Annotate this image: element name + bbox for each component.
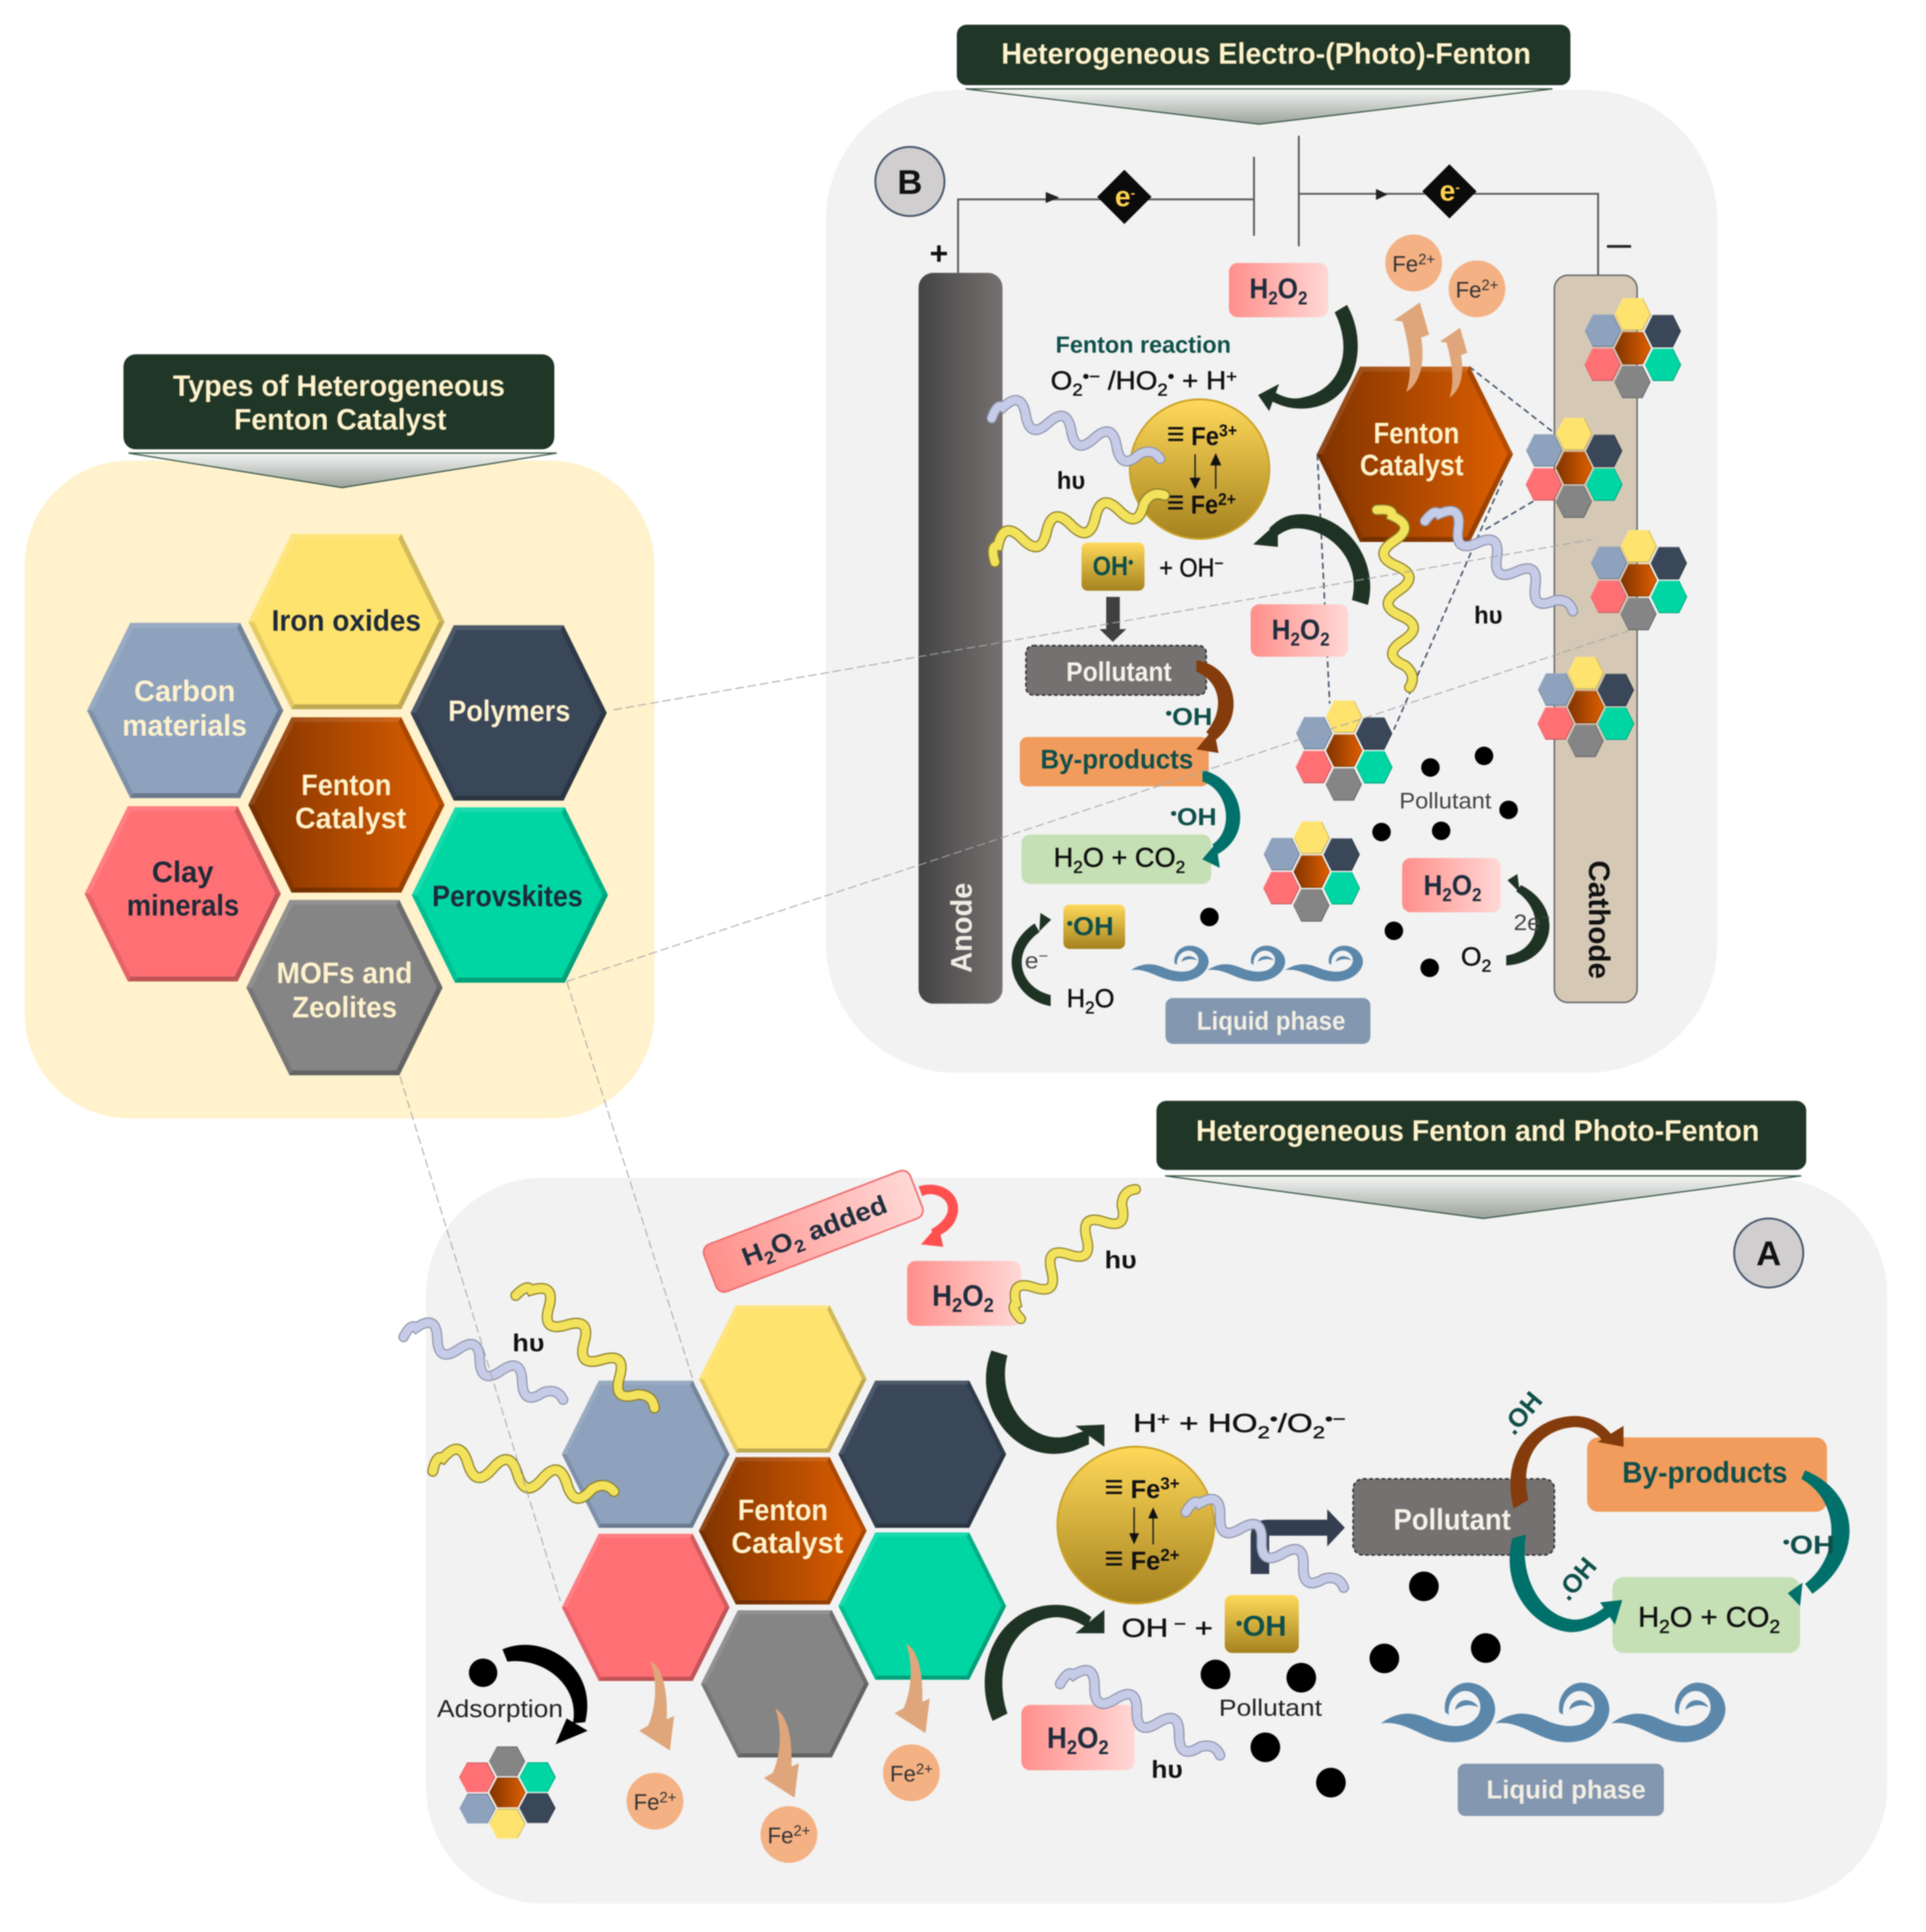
arrow: H2O2 to radicals: [1258, 305, 1358, 411]
hexagon: fenton catalyst: Catalyst: [295, 802, 406, 835]
label: hydroxyl right: OH: [1790, 1530, 1835, 1559]
hydroxyl radical box A: OH: [1242, 1610, 1286, 1642]
hexagon: mofs and zeolites: [246, 900, 443, 1075]
hexagon: iron oxides: [248, 534, 444, 709]
hexagon: clay minerals: [85, 806, 281, 981]
iron redox sphere A: 3+: [1161, 1474, 1180, 1493]
pollutant box B: Pollutant: [1066, 657, 1172, 687]
Fe2+ bubble 1: Fe: [1392, 252, 1418, 277]
label: hydroxyl right: •: [1783, 1532, 1790, 1552]
H2O2 box middle: H: [1272, 614, 1292, 646]
hexagon: polymers: Polymers: [448, 695, 570, 728]
arrow: adsorption: [502, 1645, 588, 1745]
H2O2 box A top: H: [932, 1279, 953, 1313]
light wave: lavender on sphere A: [1186, 1490, 1349, 1602]
arrow: pollutant to by-products: [1196, 660, 1233, 753]
water and CO2 box B: 2: [1176, 857, 1185, 876]
Fe2+ bubble 2: [1448, 260, 1505, 317]
equation: radicals A: •−: [1325, 1409, 1346, 1429]
Fe2+ bubble A2: 2+: [794, 1822, 810, 1839]
light wave: lavender to sphere: [992, 394, 1163, 474]
light wave: yellow on H2O2: [1003, 1183, 1147, 1319]
arrow: H2O2 added: [919, 1185, 958, 1247]
pollutant box A: [1353, 1479, 1554, 1555]
icon: electron diamond right: e: [1439, 175, 1455, 206]
label: two electrons: −: [1540, 909, 1550, 926]
adsorbed pollutant dot: [469, 1659, 497, 1687]
Fe2+ bubble 2: Fe: [1456, 278, 1482, 302]
pollutant dots B: [1200, 747, 1518, 977]
H2O2 box A lower: 2: [1067, 1737, 1077, 1759]
hydroxyl radical box lower: [1063, 905, 1125, 949]
hexagon: mofs and zeolites: MOFs and: [277, 957, 412, 990]
plus sign: +: [929, 236, 948, 272]
equation: superoxide and hydroperoxyl radicals: +: [1226, 366, 1237, 386]
water and CO2 box B: [1021, 834, 1211, 884]
equation: radicals A: •: [1270, 1409, 1278, 1429]
water and CO2 box B: H: [1053, 842, 1073, 873]
iron redox sphere A: ≡ Fe: [1104, 1467, 1161, 1505]
water and CO2 box A: O + CO: [1670, 1601, 1769, 1633]
icon: electron diamond right: [1422, 164, 1476, 218]
equation: radicals A: +: [1157, 1409, 1170, 1429]
arrow: pollutant to by-products A: [1510, 1416, 1624, 1508]
H2O2 added tag: 2: [791, 1235, 808, 1257]
light wave: yellow top on catalyst A: [516, 1277, 661, 1420]
H2O2 box lower: 2: [1472, 884, 1482, 905]
heading: heterogeneous fenton and photo-fenton: Heterogeneous Fenton and Photo-Fenton: [1196, 1114, 1759, 1148]
hydroxyl radical box A: •: [1236, 1613, 1242, 1633]
equation: plus hydroxide: −: [1214, 553, 1223, 573]
hexagon: clay minerals: Clay: [152, 856, 214, 889]
liquid phase label A: [1458, 1764, 1664, 1816]
H2O2 added tag: O: [766, 1226, 797, 1261]
light wave: yellow lower on catalyst A: [433, 1445, 616, 1508]
label: pollutant A: Pollutant: [1219, 1694, 1322, 1720]
icon: electron diamond left: -: [1131, 186, 1135, 201]
hexagon: carbon materials: materials: [122, 709, 247, 742]
hexagon: fenton catalyst: [248, 717, 444, 893]
zoom lines linking catalyst types to panels: [400, 539, 1629, 1601]
Fe2+ bubble A3: 2+: [916, 1760, 933, 1777]
catalyst cluster on cathode 4: [1538, 657, 1634, 757]
label: electron: e: [1025, 949, 1037, 974]
hexagon: carbon materials: [87, 623, 283, 798]
H2O2 box lower: 2: [1442, 884, 1452, 905]
H2O2 box A lower: O: [1077, 1722, 1098, 1755]
equation: superoxide and hydroperoxyl radicals: 2: [1072, 380, 1083, 400]
anode: Anode: [945, 883, 978, 973]
heading: heterogeneous electro-(photo)-fenton: [957, 25, 1570, 124]
icon: electron diamond right: -: [1455, 180, 1460, 195]
label: adsorption: Adsorption: [437, 1695, 563, 1723]
light wave: lavender on catalyst: [1425, 501, 1578, 625]
liquid phase label B: [1166, 998, 1370, 1044]
heading: types of heterogeneous fenton catalyst: Types of Heterogeneous: [173, 369, 505, 402]
equation: radicals A: H: [1133, 1408, 1152, 1438]
equation: hydroxide plus: −: [1168, 1614, 1186, 1633]
light wave: lavender on H2O2: [1060, 1662, 1225, 1770]
H2O2 added tag: [701, 1168, 925, 1295]
pollutant dots A: [1201, 1572, 1501, 1797]
hexagon: iron oxides: Iron oxides: [272, 604, 421, 637]
Fe2+ bubble A2: [760, 1806, 817, 1863]
H2O2 box top: O: [1278, 273, 1298, 305]
H2O2 box A lower: H: [1047, 1722, 1069, 1755]
water and CO2 box A: 2: [1659, 1616, 1670, 1637]
label: photon energy right: hυ: [1474, 602, 1502, 629]
water and CO2 box B: O + CO: [1083, 842, 1176, 873]
H2O2 box middle: [1251, 604, 1348, 657]
by-products box B: [1020, 737, 1209, 786]
label: photon energy left: hυ: [1057, 467, 1085, 494]
catalyst cluster on cathode 1: [1584, 298, 1681, 398]
Fe2+ bubble A1: 2+: [659, 1789, 676, 1806]
Fe2+ bubble 2: 2+: [1482, 277, 1498, 293]
circuit wires: [958, 136, 1598, 276]
anode: [919, 273, 1002, 1004]
label: hydroxyl lower: •: [1171, 804, 1177, 823]
liquid swirls B: [1131, 946, 1363, 981]
equation: superoxide and hydroperoxyl radicals: •: [1168, 366, 1175, 386]
water and CO2 box A: 2: [1769, 1616, 1780, 1637]
equation: superoxide and hydroperoxyl radicals: + H: [1175, 366, 1226, 395]
liquid swirls A: [1381, 1683, 1726, 1742]
label: oxygen: O: [1461, 942, 1481, 971]
icon: electron diamond left: e: [1115, 180, 1131, 212]
label: hydroxyl upper: OH: [1172, 703, 1212, 731]
by-products box B: By-products: [1040, 744, 1193, 774]
H2O2 box lower: [1402, 858, 1501, 912]
badge: B: B: [897, 163, 923, 201]
big catalyst cluster A: [562, 1305, 1006, 1757]
hydroxyl radical box lower: •: [1067, 913, 1073, 933]
H2O2 box A top: 2: [952, 1295, 962, 1316]
hexagon: perovskites: [412, 807, 608, 983]
H2O2 box A top: 2: [984, 1295, 994, 1316]
panel: types of catalyst: [25, 354, 654, 1118]
equation: superoxide and hydroperoxyl radicals: /HO: [1100, 366, 1157, 395]
H2O2 added tag: 2: [762, 1246, 778, 1269]
arrow: Fe2+ release A1: [639, 1662, 674, 1751]
H2O2 box top: [1229, 263, 1328, 317]
H2O2 box middle: 2: [1291, 629, 1300, 650]
water and CO2 box B: 2: [1073, 857, 1083, 876]
water and CO2 box A: H: [1638, 1601, 1659, 1633]
arrow: Fe2+ release 2: [1440, 328, 1468, 397]
iron redox sphere B: ≡ Fe: [1167, 415, 1222, 452]
catalyst cluster on cathode 2: [1526, 417, 1622, 518]
heading: heterogeneous electro-(photo)-fenton: Heterogeneous Electro-(Photo)-Fenton: [1001, 38, 1531, 71]
arrow: Fe2+ release A3: [895, 1644, 930, 1733]
badge: B: [875, 147, 944, 216]
badge: A: A: [1756, 1235, 1781, 1273]
equation: plus hydroxide: + OH: [1159, 553, 1221, 582]
arrow: oxygen reduction: [1506, 874, 1549, 965]
badge: A: [1734, 1218, 1803, 1288]
label: photon energy A bottom: hυ: [1151, 1756, 1183, 1783]
equation: radicals A: + HO: [1170, 1408, 1258, 1438]
label: oxygen: 2: [1482, 956, 1492, 975]
liquid phase label A: Liquid phase: [1487, 1775, 1646, 1804]
Fe2+ bubble A3: [883, 1745, 940, 1801]
Fe2+ bubble 1: 2+: [1418, 251, 1435, 268]
panel A: heterogeneous fenton and photo-fenton: [403, 1101, 1887, 1903]
label: photon energy A left: hυ: [512, 1329, 544, 1357]
hexagon: carbon materials: Carbon: [134, 675, 235, 708]
light wave: yellow on catalyst: [1377, 508, 1419, 689]
hydroxyl radical box lower: OH: [1073, 911, 1113, 940]
arrow: Fe2+ release 1: [1394, 302, 1429, 392]
H2O2 box A lower: [1021, 1705, 1135, 1770]
hydroxyl radical box A: [1225, 1595, 1299, 1653]
H2O2 box lower: O: [1452, 869, 1472, 901]
H2O2 box A top: O: [962, 1279, 984, 1313]
arrow: hydroxyl to pollutant: [1099, 597, 1126, 642]
zoom lines from catalyst hexagon: [1317, 366, 1553, 729]
Fe2+ bubble 1: [1385, 235, 1442, 291]
hexagon: fenton catalyst B: Catalyst: [1360, 449, 1464, 482]
H2O2 box middle: O: [1300, 614, 1320, 646]
catalyst cluster in liquid 1: [1296, 700, 1392, 801]
arrow: H2O2 to hydroxyl: [1253, 514, 1370, 605]
light wave: yellow to sphere: [988, 487, 1170, 562]
equation: superoxide and hydroperoxyl radicals: •−: [1083, 366, 1100, 386]
arrow: H2O2 to radicals A: [986, 1351, 1104, 1454]
H2O2 box top: 2: [1268, 288, 1278, 309]
hexagon: perovskites: Perovskites: [432, 880, 583, 913]
arrow: by-products to water and CO2: [1202, 770, 1240, 868]
heading: types of heterogeneous fenton catalyst: Fenton Catalyst: [234, 403, 447, 437]
arrow: pollutant to water and CO2 A: [1510, 1535, 1622, 1632]
label: hydroxyl rotated top: .OH: [1496, 1386, 1548, 1440]
minus sign: [1607, 245, 1631, 248]
arrow: H2O2 to hydroxyl A: [985, 1605, 1104, 1721]
big catalyst cluster A: Catalyst: [731, 1527, 843, 1560]
iron redox sphere B: ≡ Fe: [1167, 483, 1222, 521]
cathode: Cathode: [1582, 860, 1615, 979]
hydroxyl radical box: •: [1128, 552, 1134, 572]
H2O2 box top: H: [1249, 273, 1270, 305]
H2O2 box middle: 2: [1320, 629, 1329, 650]
hexagon: fenton catalyst: Fenton: [301, 769, 391, 802]
light wave: lavender on catalyst A: [403, 1315, 567, 1414]
iron redox sphere A: [1057, 1447, 1214, 1604]
pollutant box A: Pollutant: [1393, 1503, 1511, 1536]
Fe2+ bubble A2: Fe: [768, 1824, 794, 1848]
H2O2 box A lower: 2: [1098, 1737, 1109, 1759]
label: pollutant B: Pollutant: [1399, 788, 1492, 813]
hexagon: mofs and zeolites: Zeolites: [292, 991, 397, 1024]
iron redox sphere A: 2+: [1161, 1545, 1180, 1565]
label: photon energy A top: hυ: [1104, 1246, 1137, 1274]
hydroxyl radical box: OH: [1093, 551, 1134, 581]
Fe2+ bubble A3: Fe: [890, 1762, 916, 1787]
equation: hydroxide plus: OH: [1121, 1613, 1161, 1642]
big catalyst cluster A: Fenton: [738, 1494, 828, 1527]
equation: radicals A: 2: [1258, 1422, 1270, 1442]
cathode: [1554, 276, 1637, 1002]
liquid phase label B: Liquid phase: [1197, 1006, 1346, 1035]
small inverted catalyst cluster: [459, 1746, 556, 1839]
label: two electrons: 2e: [1514, 910, 1538, 935]
Fe2+ bubble A1: Fe: [634, 1790, 659, 1815]
equation: radicals A: /O: [1278, 1408, 1313, 1438]
hydroxyl radical box: [1081, 543, 1144, 591]
label: water: H: [1067, 984, 1085, 1013]
hexagon: fenton catalyst B: [1317, 366, 1513, 542]
equation: superoxide and hydroperoxyl radicals: O: [1051, 366, 1071, 395]
label: fenton reaction: Fenton reaction: [1056, 331, 1231, 357]
by-products box A: [1587, 1438, 1827, 1512]
iron redox sphere B: 3+: [1219, 421, 1237, 440]
H2O2 box A top: [907, 1261, 1021, 1326]
iron redox sphere A: ≡ Fe: [1104, 1539, 1161, 1577]
arrow: Fe2+ release A2: [764, 1709, 799, 1798]
label: electron: −: [1039, 947, 1048, 964]
arrow: block arrow to pollutant: [1251, 1509, 1345, 1574]
hexagon: polymers: [411, 625, 607, 801]
panel B: heterogeneous electro-(photo)-fenton: [826, 25, 1717, 1073]
hexagon: fenton catalyst B: Fenton: [1374, 417, 1459, 450]
label: water: O: [1095, 984, 1115, 1013]
catalyst cluster in liquid 2: [1263, 822, 1360, 921]
heading: heterogeneous fenton and photo-fenton: [1157, 1101, 1806, 1218]
label: water: 2: [1085, 998, 1095, 1017]
catalyst cluster on cathode 3: [1590, 530, 1687, 630]
iron redox sphere B: 2+: [1218, 489, 1236, 509]
icon: electron diamond left: [1097, 169, 1152, 224]
equation: superoxide and hydroperoxyl radicals: 2: [1157, 380, 1168, 400]
hexagon: clay minerals: minerals: [127, 889, 239, 923]
by-products box A: By-products: [1622, 1456, 1787, 1489]
label: hydroxyl lower: OH: [1177, 804, 1217, 831]
H2O2 box top: 2: [1298, 288, 1308, 309]
pollutant box B: [1026, 646, 1206, 695]
equation: hydroxide plus: +: [1186, 1613, 1213, 1642]
arrow: by-products to water and CO2 A: [1788, 1470, 1850, 1606]
label: hydroxyl rotated lower: .OH: [1551, 1552, 1602, 1606]
arrow: water oxidation: [1012, 913, 1051, 1006]
H2O2 added tag: added: [796, 1190, 891, 1249]
H2O2 box lower: H: [1424, 869, 1444, 901]
heading: types of heterogeneous fenton catalyst: [123, 354, 557, 488]
label: hydroxyl upper: •: [1166, 703, 1172, 723]
H2O2 added tag: H: [737, 1238, 765, 1272]
water and CO2 box A: [1612, 1577, 1800, 1653]
iron redox sphere B: [1130, 400, 1269, 539]
equation: radicals A: 2: [1313, 1422, 1325, 1442]
Fe2+ bubble A1: [626, 1773, 684, 1829]
